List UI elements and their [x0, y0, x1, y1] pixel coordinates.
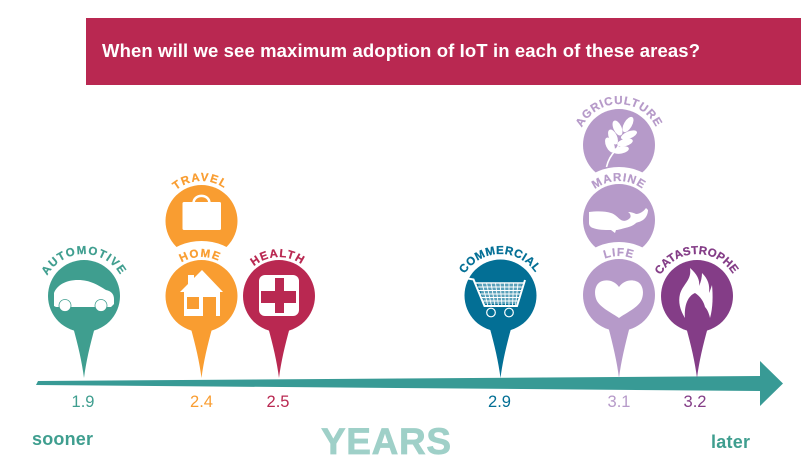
pin: life	[583, 248, 655, 378]
banner heading: When will we see maximum adoption of IoT in each of these areas?	[102, 40, 700, 61]
label: life: LIFE	[603, 248, 634, 258]
year value: commercial: 2.9	[488, 393, 511, 411]
label: automotive: AUTOMOTIVE	[42, 246, 126, 276]
icon: car	[54, 280, 114, 312]
pin: marine	[583, 173, 655, 248]
year value: life, marine and agriculture: 3.1	[608, 393, 630, 411]
label: home: HOME	[178, 248, 221, 262]
header banner	[86, 18, 801, 85]
icon: shopping cart	[468, 278, 525, 317]
pin: commercial	[460, 246, 539, 378]
icon: house	[180, 270, 223, 316]
label: commercial: COMMERCIAL	[460, 246, 539, 272]
label: catastrophe: CATASTROPHE	[655, 246, 739, 274]
pin: travel	[166, 172, 238, 247]
axis title: years: YEARS	[321, 421, 451, 462]
timeline arrow	[36, 361, 783, 406]
year value: home and travel: 2.4	[190, 393, 213, 411]
icon: flame	[679, 268, 713, 318]
icon: wheat	[603, 115, 638, 167]
pin: agriculture	[576, 96, 662, 172]
label: health: HEALTH	[250, 248, 305, 266]
year value: catastrophe: 3.2	[684, 393, 706, 411]
pin: automotive	[42, 246, 126, 378]
icon: whale	[589, 208, 648, 233]
year value: automotive: 1.9	[72, 393, 94, 411]
label: later: later	[711, 432, 750, 452]
icon: heart	[595, 280, 643, 318]
icon: medical cross	[259, 275, 299, 316]
label: sooner: sooner	[32, 429, 93, 449]
pin: home	[166, 248, 238, 378]
pin: health	[243, 248, 315, 378]
icon: suitcase	[182, 196, 221, 230]
label: agriculture: AGRICULTURE	[576, 96, 662, 128]
pin: catastrophe	[655, 246, 739, 378]
label: marine: MARINE	[591, 173, 646, 189]
label: travel: TRAVEL	[171, 172, 224, 189]
year value: health: 2.5	[267, 393, 289, 411]
